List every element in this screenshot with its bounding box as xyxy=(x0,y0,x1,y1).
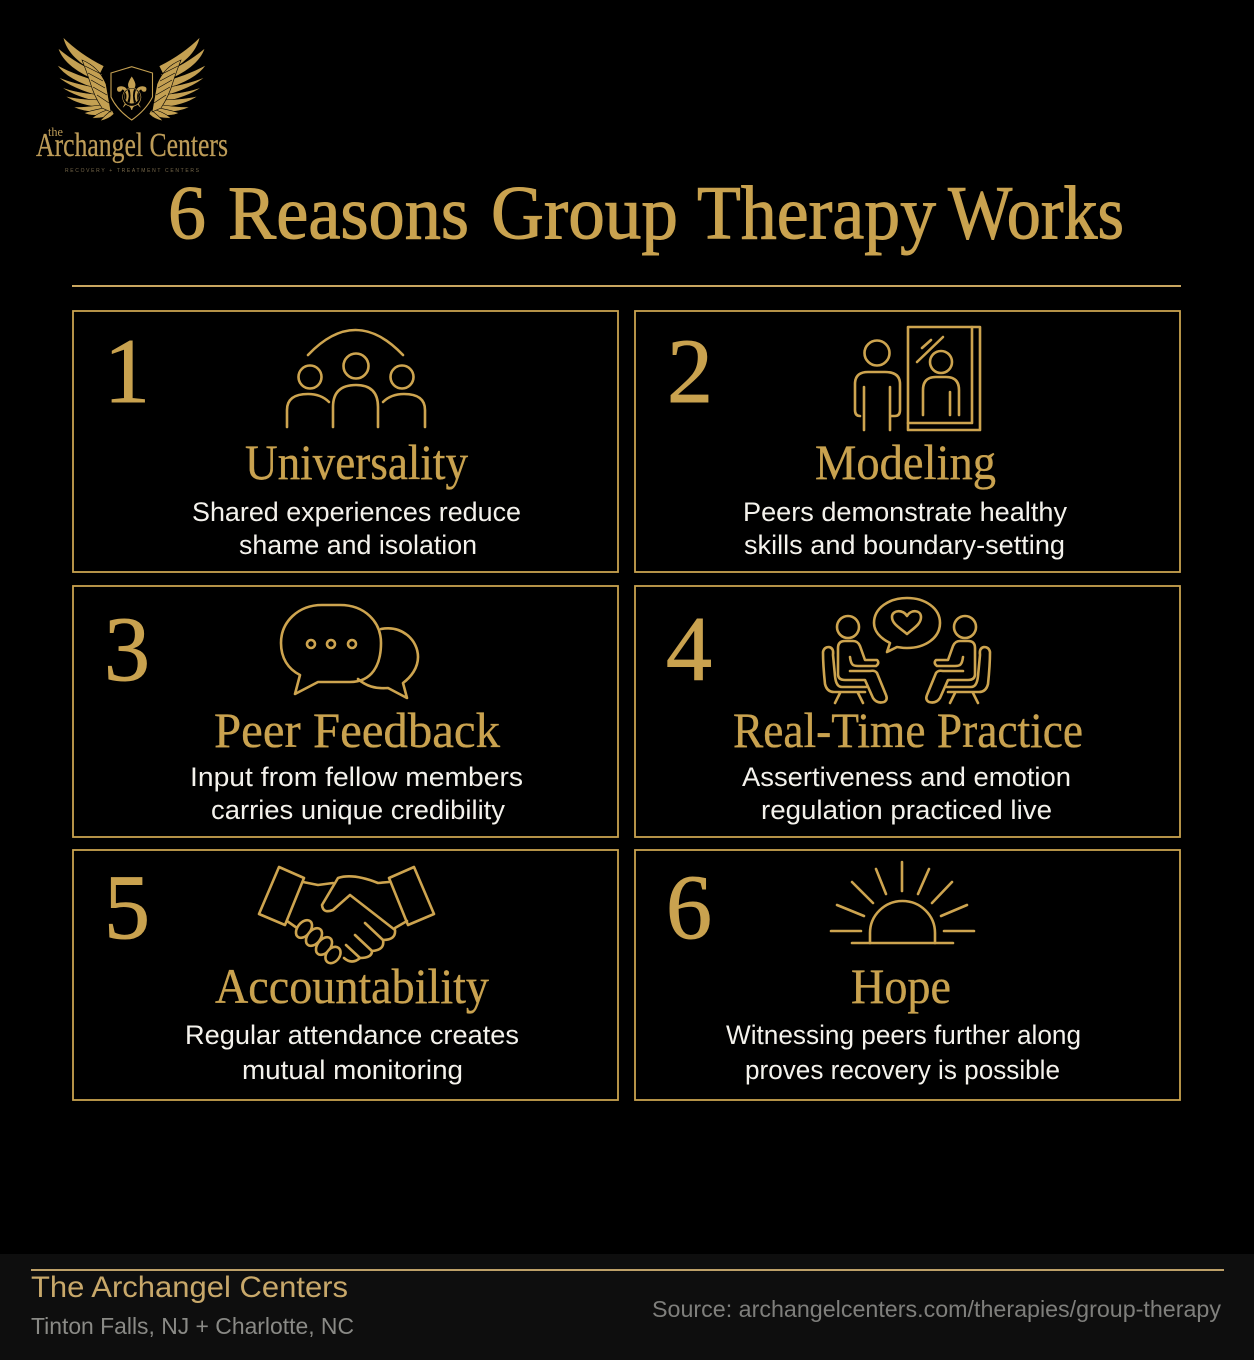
description xyxy=(190,762,523,825)
icon: wings and shield: ⚜ xyxy=(111,67,152,121)
description xyxy=(192,497,521,560)
panel: peer feedback xyxy=(73,586,618,837)
title: Reasons xyxy=(228,172,469,256)
description: Regular attendance creates xyxy=(185,1020,519,1050)
description: shame and isolation xyxy=(239,530,477,560)
logo tagline: RECOVERY + TREATMENT CENTERS xyxy=(65,168,200,174)
number 1: 1 xyxy=(104,320,150,422)
icon: handshake xyxy=(259,867,434,966)
panel: real-time practice xyxy=(635,586,1180,837)
title: Therapy xyxy=(697,172,936,256)
heading: Peer Feedback xyxy=(214,702,500,758)
panel: universality xyxy=(73,311,618,572)
panel: modeling xyxy=(635,311,1180,572)
panel: hope xyxy=(635,850,1180,1100)
number 6: 6 xyxy=(666,856,712,958)
logo: Archangel Centers xyxy=(36,127,228,164)
icon: rising sun xyxy=(831,862,974,943)
number 2: 2 xyxy=(667,320,713,422)
description: Shared experiences reduce xyxy=(192,497,521,527)
description: carries unique credibility xyxy=(211,795,505,825)
footer organisation name: The Archangel Centers xyxy=(31,1271,348,1304)
number 5: 5 xyxy=(104,856,150,958)
logo wordmark: the xyxy=(48,124,63,139)
description: Witnessing peers further along xyxy=(726,1020,1081,1050)
panel: accountability xyxy=(73,850,618,1100)
description: regulation practiced live xyxy=(761,795,1052,825)
description: Assertiveness and emotion xyxy=(742,762,1071,792)
footer locations: Tinton Falls, NJ + Charlotte, NC xyxy=(31,1313,354,1339)
icon: group of people xyxy=(287,330,425,427)
icon: wings and shield xyxy=(57,37,206,121)
title: 6 xyxy=(168,172,206,256)
description xyxy=(743,497,1067,560)
description xyxy=(742,762,1071,825)
logo xyxy=(36,37,228,174)
icon: speech bubbles xyxy=(281,605,418,698)
icon: two seated people with heart bubble xyxy=(823,598,990,703)
title xyxy=(168,172,1124,256)
heading: Universality xyxy=(245,434,468,490)
title: Group xyxy=(491,172,678,256)
icon: person and mirror xyxy=(855,327,980,430)
description: mutual monitoring xyxy=(242,1055,463,1085)
description: Peers demonstrate healthy xyxy=(743,497,1067,527)
heading: Accountability xyxy=(215,958,489,1014)
heading: Modeling xyxy=(815,434,996,490)
title: Works xyxy=(948,172,1124,256)
description xyxy=(185,1020,519,1085)
heading: Real-Time Practice xyxy=(733,702,1083,758)
description: Input from fellow members xyxy=(190,762,523,792)
heading: Hope xyxy=(851,958,951,1014)
number 3: 3 xyxy=(104,598,150,700)
description: proves recovery is possible xyxy=(745,1055,1060,1085)
description: skills and boundary-setting xyxy=(744,530,1065,560)
footer xyxy=(0,1254,1254,1360)
footer source: Source: archangelcenters.com/therapies/group-therapy xyxy=(652,1296,1221,1322)
description xyxy=(726,1020,1081,1085)
number 4: 4 xyxy=(666,598,712,700)
